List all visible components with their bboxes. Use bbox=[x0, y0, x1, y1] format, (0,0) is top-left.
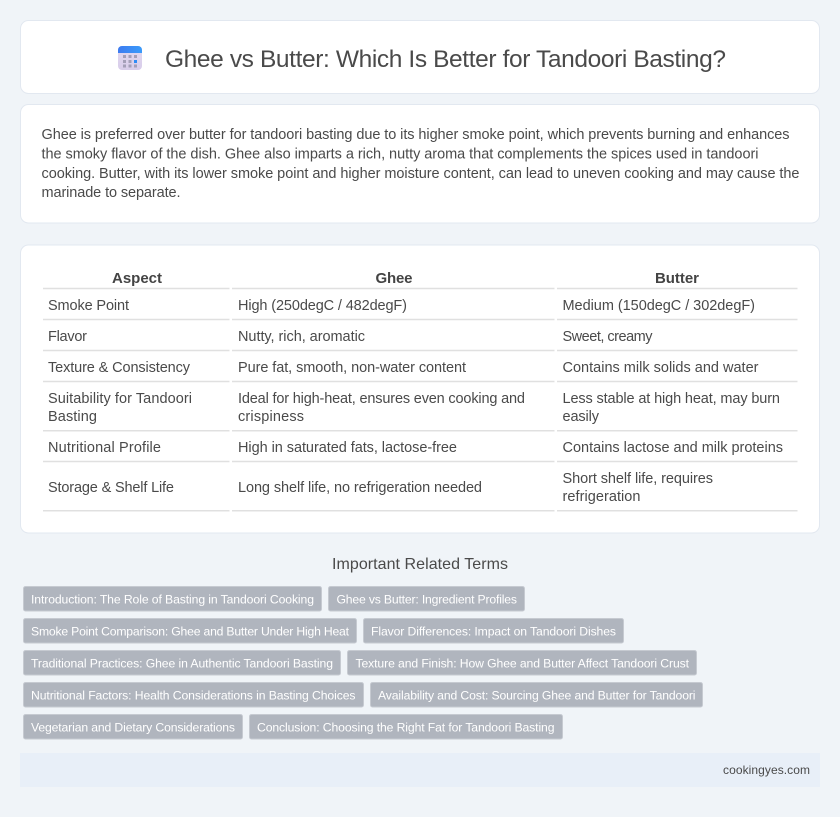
table header bbox=[112, 270, 699, 287]
intro text: the smoky flavor of the dish. Ghee also imparts a rich, nutty aroma that complements the spices used in tandoori bbox=[42, 146, 758, 162]
related terms tags bbox=[24, 586, 702, 739]
tag: Conclusion: Choosing the Right Fat for Tandoori Basting bbox=[257, 720, 554, 734]
tag bbox=[24, 586, 322, 611]
row: texture: Contains milk solids and water bbox=[562, 360, 759, 376]
panel: comparison table bbox=[20, 245, 820, 533]
row: nutrition: Contains lactose and milk proteins bbox=[562, 440, 783, 456]
icon: calendar bbox=[118, 46, 142, 70]
row: nutrition bbox=[48, 440, 783, 456]
row: suitability: Less stable at high heat, may burn bbox=[562, 391, 780, 407]
intro text: cooking. Butter, with its lower smoke point and higher moisture content, can lead to uneven cooking and may cause the bbox=[42, 166, 800, 182]
table header: Butter bbox=[655, 270, 699, 287]
intro text: Ghee is preferred over butter for tandoori basting due to its higher smoke point, which prevents burning and enhances bbox=[42, 127, 790, 143]
row: storage: Long shelf life, no refrigeration needed bbox=[238, 480, 482, 496]
title: Ghee vs Butter: Which Is Better for Tandoori Basting? bbox=[165, 46, 726, 73]
row: smoke point: Smoke Point bbox=[48, 298, 129, 314]
footer: cookingyes.com bbox=[723, 763, 810, 777]
tag bbox=[24, 618, 356, 643]
tag bbox=[24, 650, 340, 675]
row: suitability bbox=[48, 391, 780, 425]
row: suitability: easily bbox=[562, 409, 600, 425]
tag: Flavor Differences: Impact on Tandoori Dishes bbox=[371, 624, 616, 638]
row: flavor bbox=[48, 329, 653, 345]
tag bbox=[24, 714, 242, 739]
tag: Ghee vs Butter: Ingredient Profiles bbox=[336, 592, 517, 606]
tag: Nutritional Factors: Health Considerations in Basting Choices bbox=[31, 688, 356, 702]
row: storage: Storage & Shelf Life bbox=[48, 480, 174, 496]
row: nutrition: High in saturated fats, lactose-free bbox=[238, 440, 457, 456]
footer bbox=[20, 753, 820, 787]
table header: Aspect bbox=[112, 270, 162, 287]
row: flavor: Nutty, rich, aromatic bbox=[238, 329, 365, 345]
tag: Smoke Point Comparison: Ghee and Butter Under High Heat bbox=[31, 624, 350, 638]
row: smoke point: High (250degC / 482degF) bbox=[238, 298, 407, 314]
row: texture bbox=[48, 360, 759, 376]
tag: Vegetarian and Dietary Considerations bbox=[31, 720, 235, 734]
row: storage bbox=[48, 471, 713, 505]
row: suitability: Suitability for Tandoori bbox=[48, 391, 192, 407]
tag bbox=[24, 682, 364, 707]
tag: Introduction: The Role of Basting in Tandoori Cooking bbox=[31, 592, 314, 606]
tag bbox=[348, 650, 696, 675]
related terms heading: Important Related Terms bbox=[332, 556, 508, 573]
tag: Availability and Cost: Sourcing Ghee and Butter for Tandoori bbox=[378, 688, 696, 702]
tag bbox=[328, 586, 524, 611]
row: nutrition: Nutritional Profile bbox=[48, 440, 161, 456]
row: suitability: Ideal for high-heat, ensures even cooking and bbox=[238, 391, 525, 407]
tag bbox=[370, 682, 702, 707]
intro text: marinade to separate. bbox=[42, 185, 180, 201]
tag bbox=[364, 618, 624, 643]
intro text bbox=[42, 127, 800, 201]
row: flavor: Sweet, creamy bbox=[562, 329, 653, 345]
row: flavor: Flavor bbox=[48, 329, 87, 345]
table header: Ghee bbox=[376, 270, 412, 287]
row: storage: refrigeration bbox=[562, 489, 640, 505]
row: smoke point bbox=[48, 298, 755, 314]
row: suitability: Basting bbox=[48, 409, 97, 425]
row: suitability: crispiness bbox=[238, 409, 304, 425]
tag: Texture and Finish: How Ghee and Butter Affect Tandoori Crust bbox=[356, 656, 690, 670]
row: storage: Short shelf life, requires bbox=[562, 471, 713, 487]
panel: introduction bbox=[20, 104, 820, 223]
row: smoke point: Medium (150degC / 302degF) bbox=[562, 298, 755, 314]
tag bbox=[250, 714, 562, 739]
row: texture: Texture & Consistency bbox=[48, 360, 191, 376]
tag: Traditional Practices: Ghee in Authentic Tandoori Basting bbox=[31, 656, 333, 670]
row: texture: Pure fat, smooth, non-water content bbox=[238, 360, 466, 376]
header panel bbox=[20, 20, 820, 94]
